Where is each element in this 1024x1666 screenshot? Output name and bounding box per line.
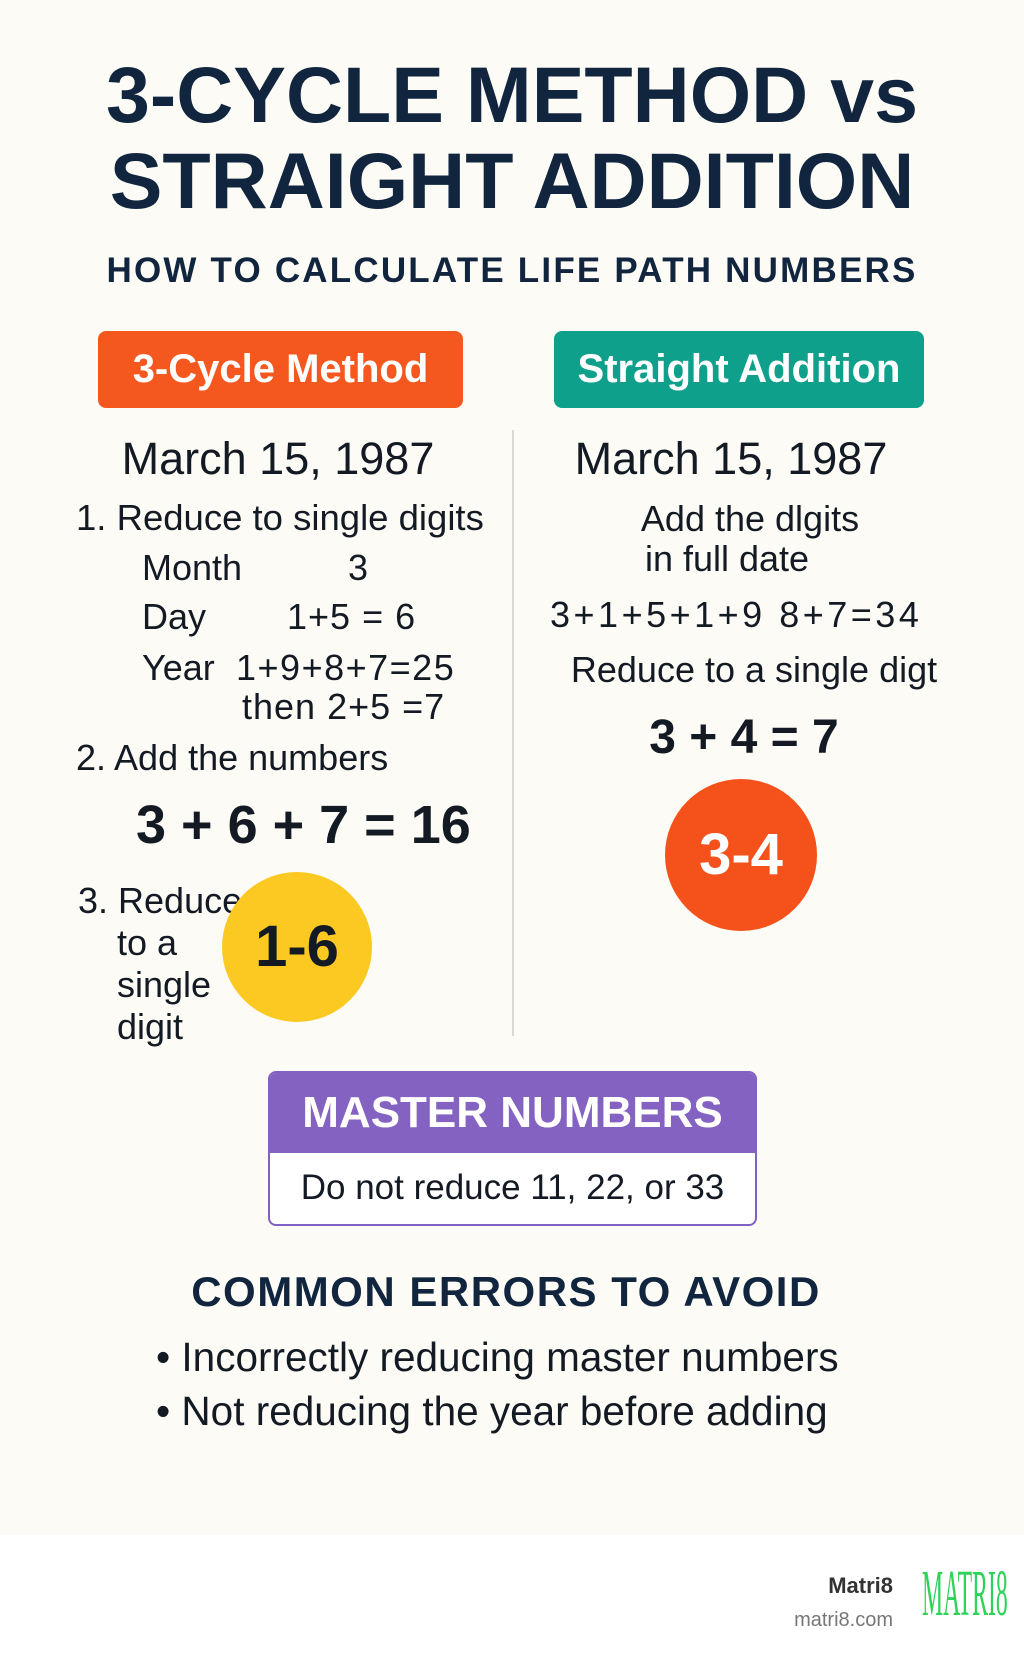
panel: 3-cycle steps: 1+5 = 6 bbox=[287, 596, 416, 637]
panel: master numbers: Do not reduce 11, 22, or 33 bbox=[301, 1168, 724, 1207]
title: 3-CYCLE METHOD vs bbox=[106, 50, 918, 139]
panel: 3-cycle steps: 3. Reduce bbox=[78, 880, 242, 921]
panel: master numbers: MASTER NUMBERS bbox=[302, 1088, 723, 1137]
panel: 3-cycle steps: Year bbox=[142, 647, 215, 688]
icon: red circle 3-4: 3-4 bbox=[699, 822, 783, 887]
footer: Matri8 bbox=[828, 1573, 893, 1598]
panel: 3-cycle steps: Month bbox=[142, 547, 242, 588]
icon: yellow circle 1-6 bbox=[222, 872, 372, 1022]
panel: straight addition steps: in full date bbox=[645, 538, 809, 579]
button: 3-Cycle Method bbox=[98, 331, 463, 408]
panel: 3-cycle steps: 1+9+8+7=25 bbox=[236, 647, 455, 688]
panel: 3-cycle steps: 3 bbox=[348, 547, 368, 588]
panel: 3-cycle steps: 3 + 6 + 7 = 16 bbox=[136, 795, 471, 855]
panel: 3-cycle steps: Day bbox=[142, 596, 206, 637]
panel: straight addition steps: 3 + 4 = 7 bbox=[649, 711, 839, 764]
panel: straight addition steps bbox=[550, 433, 937, 764]
button: 3-Cycle Method: 3-Cycle Method bbox=[133, 347, 428, 391]
panel: master numbers bbox=[268, 1071, 757, 1226]
icon: yellow circle 1-6: 1-6 bbox=[255, 914, 339, 979]
panel: 3-cycle steps: to a bbox=[117, 922, 177, 963]
icon: red circle 3-4 bbox=[665, 779, 817, 931]
title bbox=[106, 50, 918, 225]
list: errors: • Incorrectly reducing master numbers bbox=[156, 1334, 839, 1380]
footer bbox=[0, 1535, 1024, 1666]
panel: straight addition steps: 3+1+5+1+9 8+7=34 bbox=[550, 594, 922, 635]
panel: 3-cycle steps: single bbox=[117, 964, 211, 1005]
panel: 3-cycle steps: March 15, 1987 bbox=[122, 433, 434, 484]
panel: straight addition steps: Add the dlgits bbox=[641, 498, 859, 539]
panel: straight addition steps: Reduce to a single digt bbox=[571, 649, 937, 690]
logo: MATRI8 bbox=[922, 1557, 1008, 1630]
panel: 3-cycle steps: 1. Reduce to single digits bbox=[76, 497, 484, 538]
list: errors bbox=[156, 1334, 839, 1434]
panel: 3-cycle steps: 2. Add the numbers bbox=[76, 737, 388, 778]
heading: common errors: COMMON ERRORS TO AVOID bbox=[191, 1268, 821, 1315]
subtitle: HOW TO CALCULATE LIFE PATH NUMBERS bbox=[106, 251, 918, 290]
panel: 3-cycle steps bbox=[76, 433, 484, 1047]
title: STRAIGHT ADDITION bbox=[110, 136, 914, 225]
list: errors: • Not reducing the year before adding bbox=[156, 1388, 828, 1434]
panel: 3-cycle steps: digit bbox=[117, 1006, 183, 1047]
panel: straight addition steps: March 15, 1987 bbox=[575, 433, 887, 484]
button: Straight Addition: Straight Addition bbox=[578, 347, 900, 391]
panel: 3-cycle steps: then 2+5 =7 bbox=[242, 686, 445, 727]
footer: matri8.com bbox=[794, 1609, 893, 1631]
button: Straight Addition bbox=[554, 331, 924, 408]
